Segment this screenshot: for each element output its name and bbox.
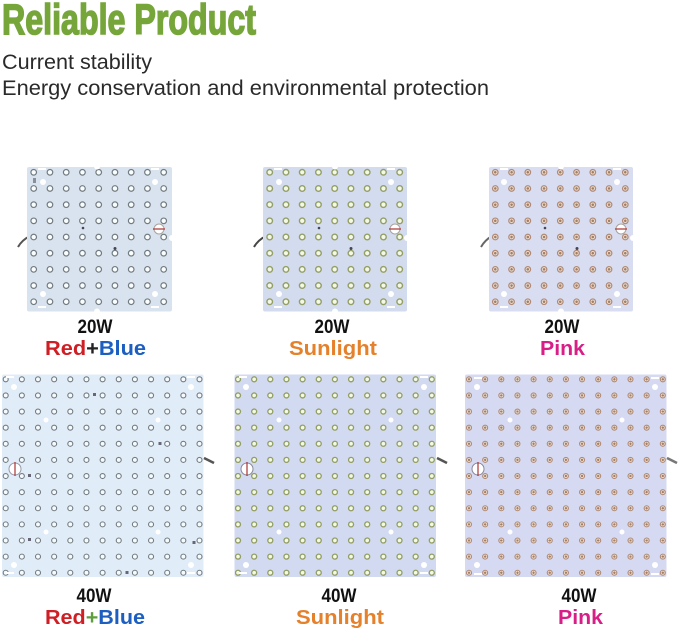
- label: 40W red and blue: 40W: [76, 586, 112, 607]
- subtitle text block: [2, 51, 489, 100]
- label: 20W pink: [540, 317, 586, 360]
- label: 40W red and blue: Red+Blue: [45, 607, 145, 629]
- label: 40W red and blue: [45, 586, 145, 629]
- label: 20W pink: Pink: [540, 338, 586, 360]
- label: 20W red and blue: Red+Blue: [45, 338, 146, 360]
- subtitle text block: Current stability: [2, 51, 153, 74]
- panel: 20W red and blue board: [18, 164, 175, 314]
- panel: 20W pink board: [481, 164, 636, 314]
- panel: 40W sunlight board: [234, 374, 447, 577]
- label: 20W red and blue: 20W: [78, 317, 113, 338]
- label: 40W pink: [558, 586, 604, 629]
- label: 20W sunlight: 20W: [314, 317, 350, 338]
- label: 20W pink: 20W: [544, 317, 580, 338]
- panel: 20W sunlight board: [254, 164, 410, 314]
- panel: 40W red and blue board: [2, 374, 214, 577]
- label: 40W sunlight: [296, 586, 384, 629]
- label: 20W sunlight: Sunlight: [289, 338, 377, 360]
- label: 20W sunlight: [289, 317, 377, 360]
- panel: 40W pink board: [465, 374, 677, 577]
- label: 40W sunlight: Sunlight: [296, 607, 384, 629]
- label: 40W pink: 40W: [562, 586, 597, 607]
- subtitle text block: Energy conservation and environmental protection: [2, 77, 489, 100]
- label: 40W sunlight: 40W: [322, 586, 357, 607]
- label: 40W pink: Pink: [558, 607, 604, 629]
- label: 20W red and blue: [45, 317, 146, 360]
